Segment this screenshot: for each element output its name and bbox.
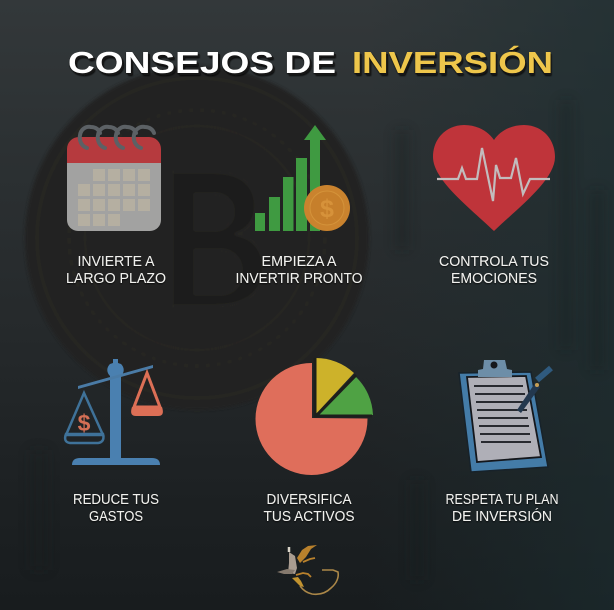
label: reduce tus gastos: REDUCE TUS — [73, 491, 159, 508]
label: respeta tu plan de inversion: DE INVERSIÓN — [452, 508, 552, 525]
label: respeta tu plan de inversion — [446, 491, 558, 525]
label: invierte a largo plazo: INVIERTE A — [78, 253, 154, 270]
icon: pie chart — [256, 358, 373, 475]
label: diversifica tus activos — [264, 491, 354, 525]
label: invierte a largo plazo: LARGO PLAZO — [66, 270, 166, 287]
title: INVERSIÓN — [352, 44, 553, 80]
icon: heart with pulse — [433, 125, 555, 231]
label: controla tus emociones: EMOCIONES — [451, 270, 537, 287]
label: invierte a largo plazo — [66, 253, 166, 287]
label: diversifica tus activos: DIVERSIFICA — [266, 491, 352, 508]
icon: growth chart with coin: $ — [320, 195, 334, 223]
label: respeta tu plan de inversion: RESPETA TU PLAN — [446, 491, 558, 508]
icon: calendar — [67, 127, 161, 231]
title shadow: CONSEJOS DE — [70, 47, 338, 82]
label: empieza a invertir pronto — [236, 253, 362, 287]
title: INVERSIÓN — [354, 46, 554, 82]
bitcoin coin background — [25, 66, 369, 410]
label: empieza a invertir pronto: EMPIEZA A — [262, 253, 336, 270]
logo: gecko — [277, 545, 338, 594]
label: empieza a invertir pronto: INVERTIR PRONTO — [236, 270, 362, 287]
title — [68, 44, 554, 82]
label: reduce tus gastos: GASTOS — [89, 508, 143, 525]
icon: clipboard and pen — [459, 360, 551, 472]
label: diversifica tus activos: TUS ACTIVOS — [264, 508, 354, 525]
icon: balance scale: $ — [78, 410, 91, 436]
label: reduce tus gastos — [73, 491, 159, 525]
icon: growth chart with coin — [255, 125, 350, 231]
icon: balance scale — [65, 359, 163, 465]
title: CONSEJOS DE — [68, 45, 336, 80]
label: controla tus emociones — [439, 253, 549, 287]
label: controla tus emociones: CONTROLA TUS — [439, 253, 549, 270]
